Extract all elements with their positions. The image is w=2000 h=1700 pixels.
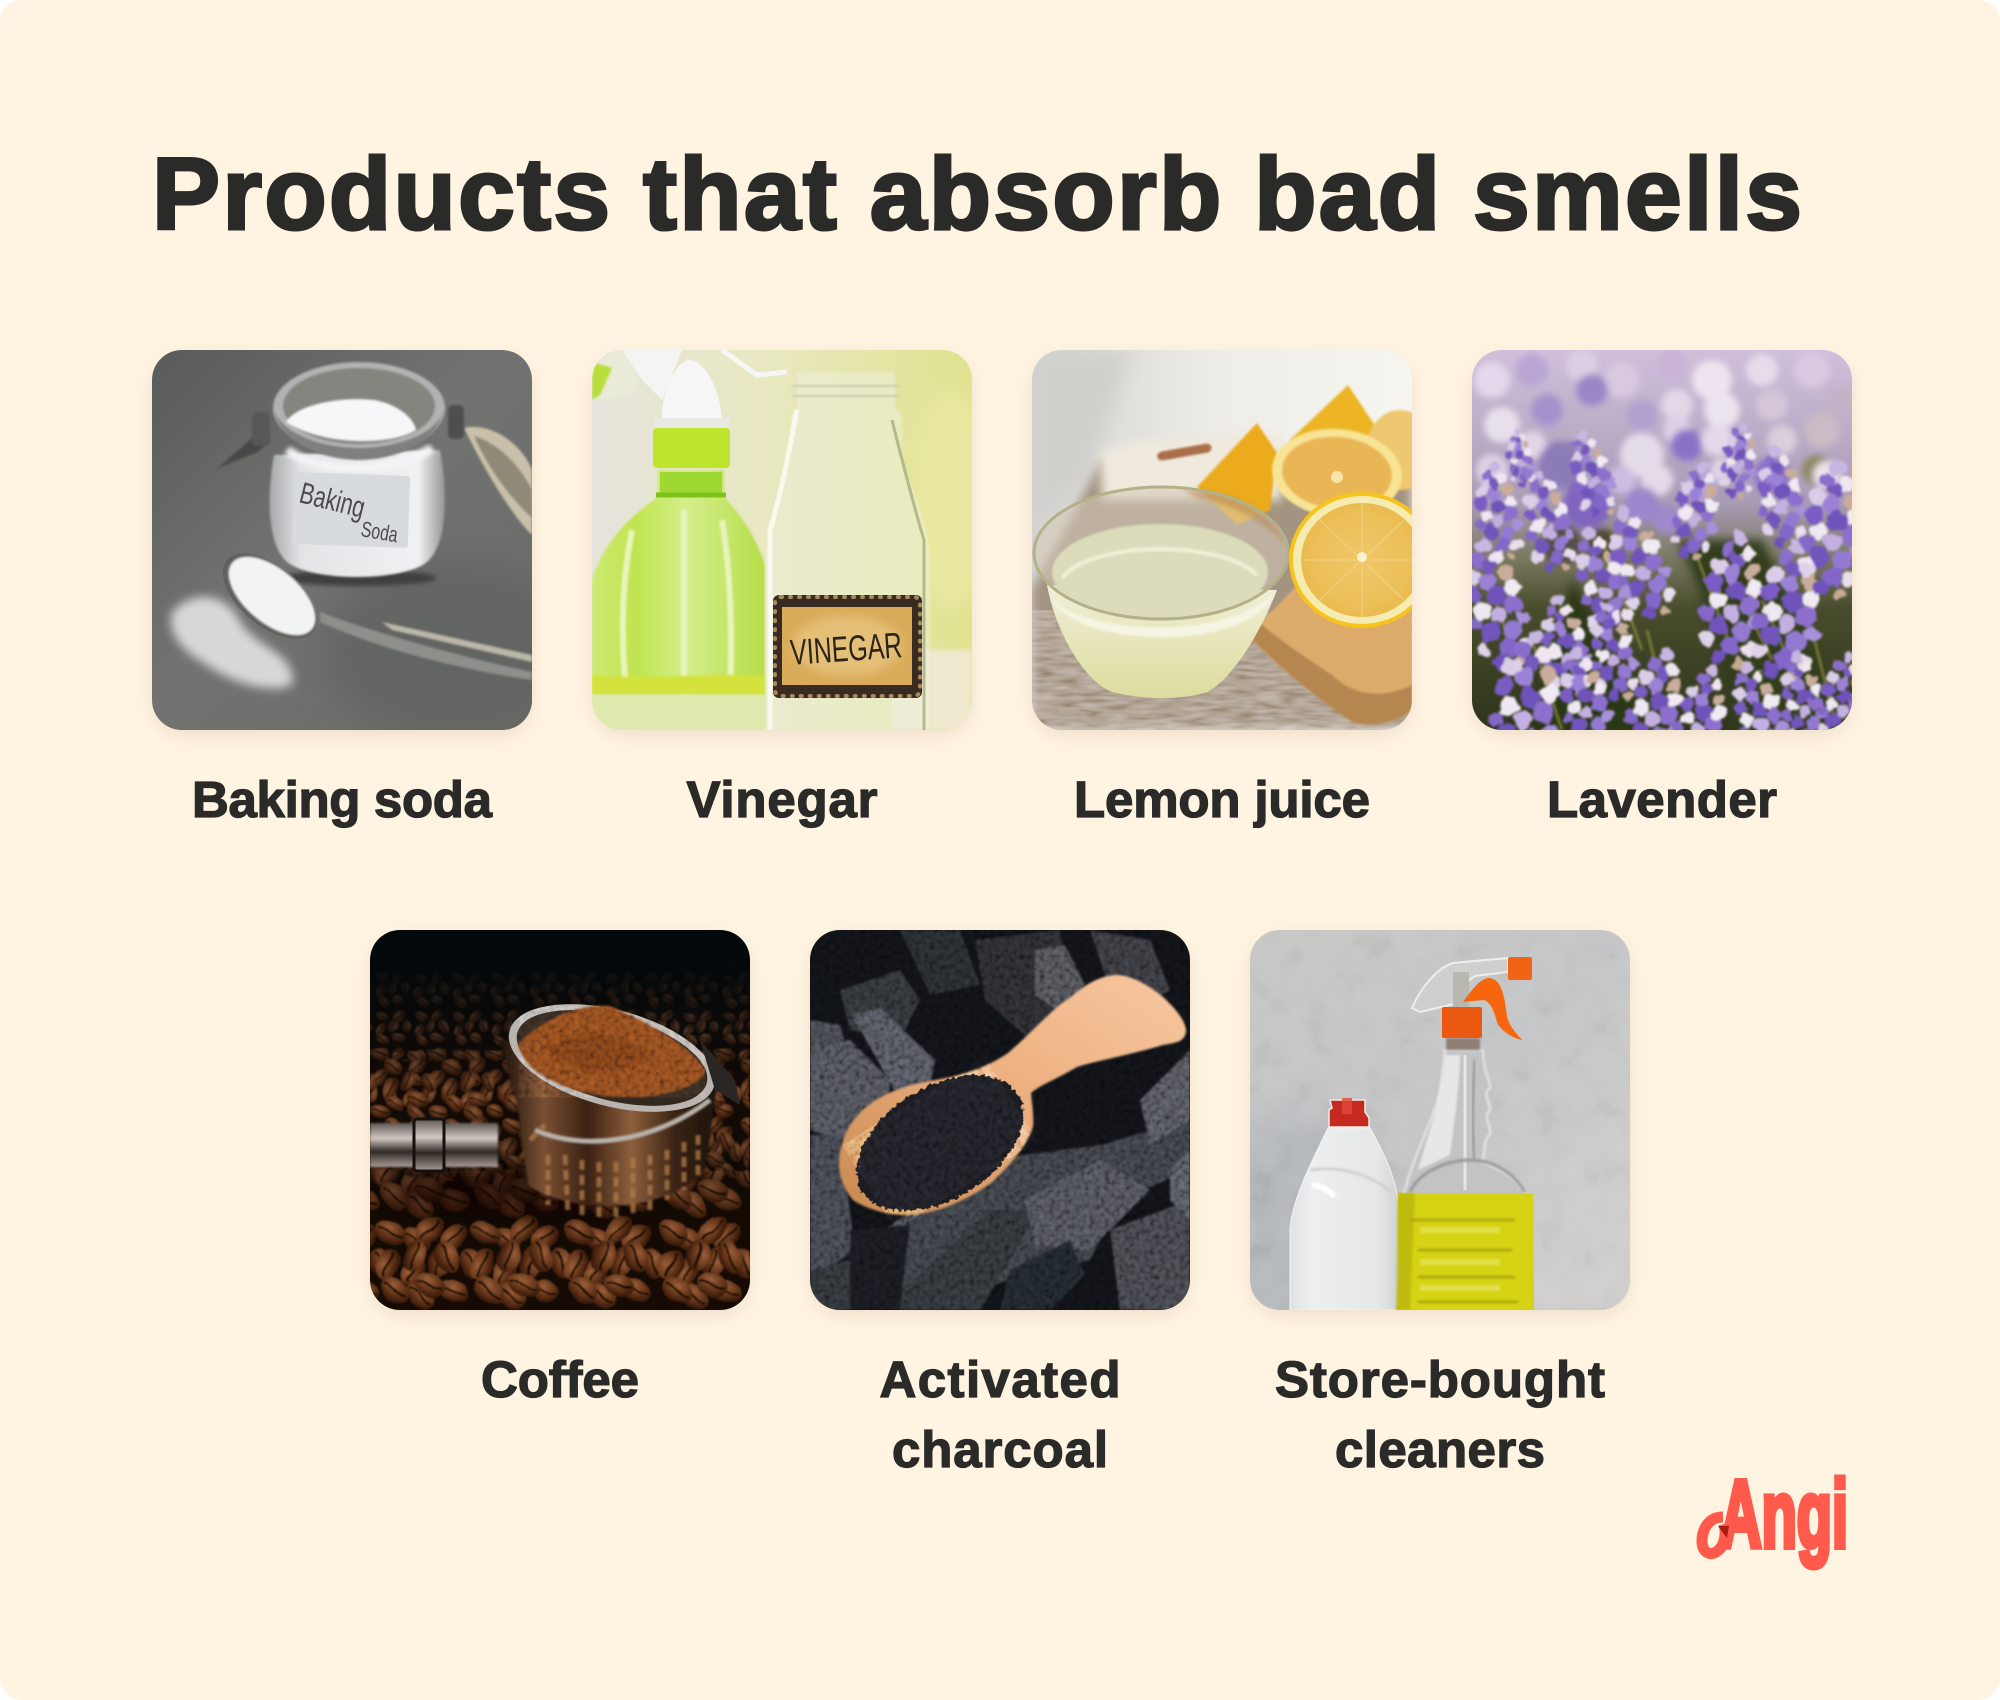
label: baking soda: Baking soda — [192, 771, 493, 828]
photo: baking soda jar and spoon: Soda — [359, 518, 400, 548]
label: store-bought cleaners — [1275, 1351, 1605, 1478]
panel: store-bought cleaners — [1247, 930, 1633, 1319]
photo: ground coffee in portafilter on beans — [370, 930, 750, 1310]
label: store-bought cleaners: cleaners — [1335, 1421, 1545, 1478]
label: activated charcoal: Activated — [880, 1351, 1120, 1408]
bottle label text: VINEGAR — [789, 624, 903, 673]
label: activated charcoal: charcoal — [892, 1421, 1108, 1478]
icon: spray bottle — [1396, 957, 1534, 1310]
label: lavender: Lavender — [1547, 771, 1777, 828]
photo: white bottle and spray bottle — [1250, 930, 1630, 1310]
label: lemon juice: Lemon juice — [1074, 771, 1370, 828]
icon: white bottle — [1290, 1098, 1400, 1310]
photo: baking soda jar and spoon — [152, 350, 532, 730]
photo: charcoal powder on wooden spoon — [810, 930, 1190, 1310]
panel: lemon juice — [1032, 350, 1435, 734]
label: vinegar: Vinegar — [686, 771, 878, 828]
photo: lemon juice bowl and lemon slices — [1032, 350, 1435, 730]
logo: Angi: Angi — [1720, 1460, 1848, 1568]
panel: activated charcoal — [810, 930, 1190, 1314]
jar label text: Baking — [296, 475, 369, 525]
photo: spray bottle and vinegar bottle — [592, 350, 992, 730]
panel: vinegar — [592, 350, 992, 734]
label: activated charcoal — [880, 1351, 1120, 1478]
title: Products that absorb bad smells — [152, 137, 1802, 251]
panel: baking soda — [149, 350, 535, 739]
panel: lavender — [1469, 350, 1855, 739]
panel: coffee — [370, 930, 750, 1314]
label: store-bought cleaners: Store-bought — [1275, 1351, 1605, 1408]
label: coffee: Coffee — [481, 1351, 639, 1408]
photo: lavender field — [1472, 350, 1852, 730]
